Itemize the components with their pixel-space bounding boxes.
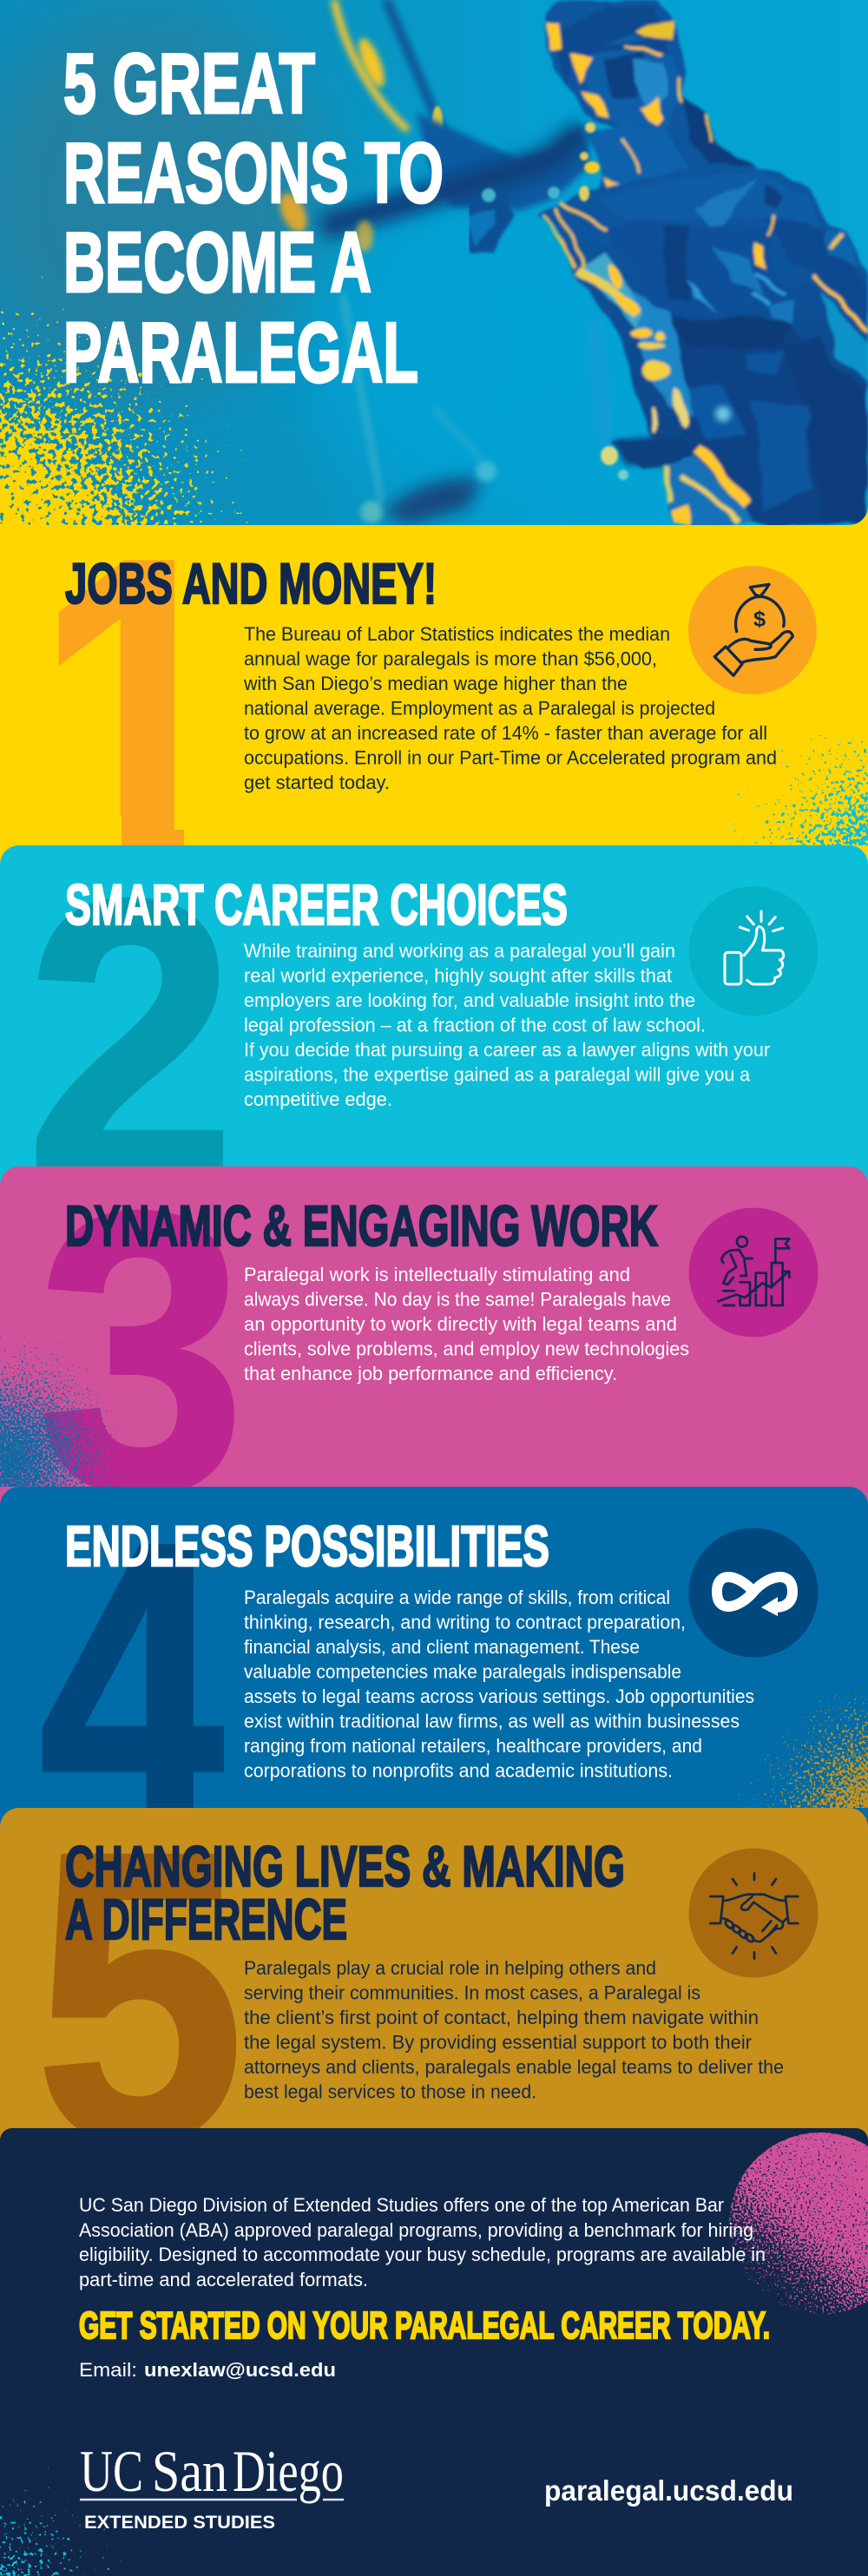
intro paragraph	[79, 2194, 766, 2290]
icon: thumbs up	[689, 887, 818, 1015]
body text: If you decide that pursuing a career as a lawyer aligns with your	[244, 1039, 770, 1061]
body text: always diverse. No day is the same! Paralegals have	[244, 1288, 671, 1311]
title	[63, 36, 444, 400]
logo: UC San Diego Extended Studies: EXTENDED STUDIES	[84, 2513, 275, 2533]
body text: the client’s first point of contact, helping them navigate within	[244, 2007, 759, 2028]
intro paragraph: UC San Diego Division of Extended Studies offers one of the top American Bar	[79, 2194, 724, 2216]
body text: serving their communities. In most cases, a Paralegal is	[244, 1982, 700, 2003]
numeral 4: 4	[39, 1458, 226, 1914]
body text: valuable competencies make paralegals indispensable	[244, 1661, 681, 1682]
title: PARALEGAL	[63, 305, 418, 400]
body text: assets to legal teams across various settings. Job opportunities	[244, 1686, 754, 1707]
body text: legal profession – at a fraction of the cost of law school.	[244, 1014, 706, 1036]
body text: financial analysis, and client management. These	[244, 1636, 640, 1658]
body text: employers are looking for, and valuable insight into the	[244, 989, 695, 1011]
panel: changing lives	[0, 1766, 868, 2227]
panel: yellow backing	[0, 486, 868, 555]
body text: national average. Employment as a Paralegal is projected	[244, 698, 715, 719]
heading: endless possibilities: ENDLESS POSSIBILITIES	[65, 1514, 549, 1578]
body text: Paralegals acquire a wide range of skills, from critical	[244, 1587, 670, 1608]
icon: money bag in hand	[688, 566, 817, 694]
body text: corporations to nonprofits and academic institutions.	[244, 1760, 673, 1781]
intro paragraph: eligibility. Designed to accommodate your busy schedule, programs are available in	[79, 2244, 766, 2265]
body text	[244, 1957, 784, 2102]
body text: Paralegals play a crucial role in helping others and	[244, 1957, 656, 1979]
website url: paralegal.ucsd.edu	[544, 2474, 793, 2507]
speckle: blue	[0, 1293, 174, 1487]
body text: The Bureau of Labor Statistics indicates the median	[244, 623, 670, 645]
icon: money bag in hand: $	[753, 608, 766, 632]
speckle: cyan	[668, 660, 868, 845]
body text: that enhance job performance and efficiency.	[244, 1363, 617, 1384]
panel: smart career choices	[0, 818, 868, 1262]
body text: competitive edge.	[244, 1088, 392, 1110]
body text	[244, 1264, 689, 1384]
numeral 5: 5	[35, 1766, 245, 2227]
logo: UC San Diego Extended Studies: Diego	[233, 2438, 344, 2504]
panel: call to action footer	[0, 2128, 868, 2576]
email line	[79, 2359, 336, 2381]
body text: to grow at an increased rate of 14% - faster than average for all	[244, 722, 767, 744]
logo: UC San Diego Extended Studies: UC	[80, 2438, 143, 2504]
speckle: pink blob	[729, 2132, 868, 2315]
body text: attorneys and clients, paralegals enable legal teams to deliver the	[244, 2056, 784, 2078]
icon: infinity loop	[689, 1528, 818, 1658]
body text: exist within traditional law firms, as well as within businesses	[244, 1710, 740, 1732]
email line: Email:	[79, 2359, 137, 2381]
numeral 1: 1	[35, 463, 242, 976]
body text	[243, 623, 777, 793]
icon: handshake	[689, 1849, 818, 1977]
heading: changing lives and making a difference: A DIFFERENCE	[65, 1887, 347, 1951]
body text: the legal system. By providing essential support to both their	[244, 2031, 752, 2054]
title: 5 GREAT	[63, 36, 315, 131]
body text: real world experience, highly sought after skills that	[244, 965, 672, 986]
body text: with San Diego’s median wage higher than the	[243, 673, 628, 694]
body text: get started today.	[244, 772, 390, 793]
heading: smart career choices: SMART CAREER CHOICES	[65, 872, 568, 936]
panel: endless possibilities	[0, 1458, 868, 1914]
body text: Paralegal work is intellectually stimulating and	[244, 1264, 630, 1285]
numeral 2: 2	[25, 818, 236, 1262]
logo: UC San Diego Extended Studies	[80, 2438, 344, 2533]
heading: changing lives and making a difference: CHANGING LIVES & MAKING	[65, 1834, 625, 1898]
numeral 3: 3	[37, 1130, 246, 1574]
heading: jobs and money: JOBS AND MONEY!	[65, 551, 437, 615]
email line: unexlaw@ucsd.edu	[144, 2359, 336, 2381]
speckle: gold	[694, 1632, 868, 1808]
title: BECOME A	[63, 214, 372, 310]
panel: jobs and money	[0, 555, 868, 864]
body text: thinking, research, and writing to contract preparation,	[244, 1611, 686, 1633]
body text	[244, 1587, 754, 1781]
body text: ranging from national retailers, healthcare providers, and	[244, 1735, 702, 1757]
body text: occupations. Enroll in our Part-Time or Accelerated program and	[244, 746, 777, 769]
icon: person climbing chart	[689, 1208, 818, 1337]
body text: annual wage for paralegals is more than $56,000,	[244, 647, 657, 670]
hero: blue statue of justice photo	[0, 0, 868, 525]
body text: clients, solve problems, and employ new technologies	[244, 1338, 689, 1359]
yellow speckle splash	[0, 276, 253, 525]
body text	[244, 940, 770, 1110]
body text: aspirations, the expertise gained as a paralegal will give you a	[244, 1064, 751, 1085]
body text: best legal services to those in need.	[244, 2081, 536, 2102]
body text: While training and working as a paralegal you’ll gain	[244, 940, 675, 962]
title: REASONS TO	[63, 125, 444, 220]
speckle: cyan	[0, 2413, 182, 2576]
panel: dynamic and engaging work	[0, 1130, 868, 1574]
intro paragraph: part-time and accelerated formats.	[79, 2269, 368, 2290]
body text: an opportunity to work directly with legal teams and	[244, 1313, 677, 1335]
heading: changing lives and making a difference	[65, 1834, 625, 1951]
intro paragraph: Association (ABA) approved paralegal programs, providing a benchmark for hiring	[79, 2219, 753, 2241]
logo: UC San Diego Extended Studies: San	[152, 2438, 227, 2504]
